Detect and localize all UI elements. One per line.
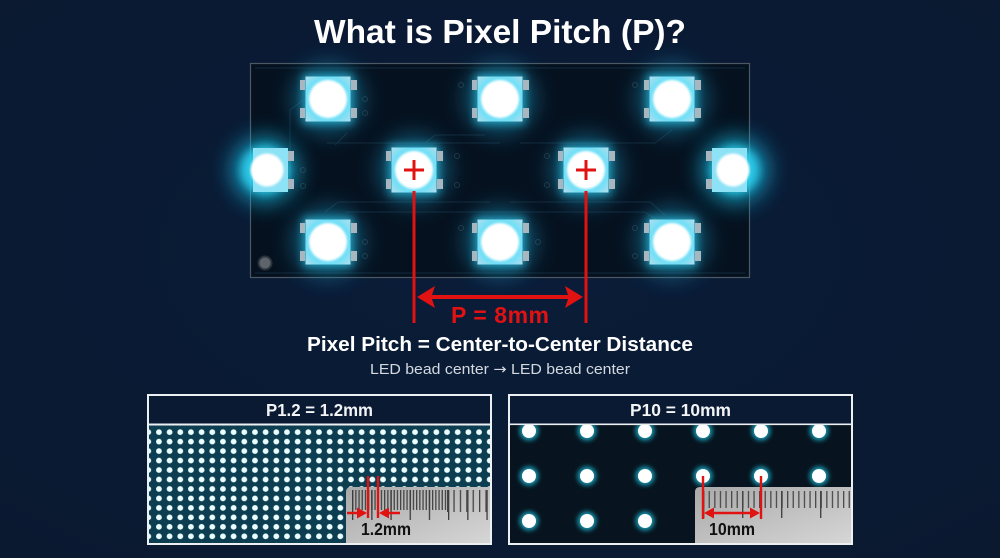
- vias: [300, 82, 638, 258]
- measurement arrows: [347, 512, 400, 514]
- measurement label: 10mm: [709, 519, 755, 539]
- panel frame: [148, 395, 491, 544]
- panel: P10: [509, 395, 852, 544]
- ruler: [346, 487, 490, 543]
- title: What is Pixel Pitch (P)?: [314, 13, 686, 50]
- sparse dot grid: [510, 422, 851, 543]
- circuit traces: [255, 68, 745, 273]
- LED row 1: [292, 63, 708, 135]
- LED left edge: [231, 136, 299, 204]
- crosshair left: [404, 160, 424, 180]
- panel frame: [509, 395, 852, 544]
- definition subtext: LED bead center → LED bead center: [370, 362, 630, 378]
- crosshair right: [576, 160, 596, 180]
- LED right edge: [701, 136, 769, 204]
- LED row 3: [292, 206, 708, 278]
- mounting hole: [258, 256, 272, 270]
- header divider: [148, 424, 491, 426]
- panel: P1.2: [148, 395, 491, 544]
- header divider: [509, 424, 852, 425]
- panel heading: P10 = 10mm: [630, 400, 731, 420]
- board base: [250, 64, 750, 278]
- definition heading: Pixel Pitch = Center-to-Center Distance: [307, 334, 693, 356]
- pitch measurement annotation: [404, 160, 596, 328]
- panel: LED circuit board: [231, 63, 769, 278]
- vertical guide left: [412, 191, 416, 323]
- measurement label: 1.2mm: [361, 519, 411, 539]
- panel heading: P1.2 = 1.2mm: [266, 400, 373, 420]
- LED row 2: [378, 134, 622, 206]
- header band: [510, 396, 851, 424]
- ruler: [695, 487, 851, 543]
- measurement arrow: [709, 512, 755, 514]
- measurement lines: [368, 476, 378, 518]
- double arrow: [417, 286, 583, 308]
- pitch value: P = 8mm: [451, 302, 549, 328]
- vertical guide right: [584, 191, 588, 323]
- measurement lines: [703, 476, 761, 519]
- fine dot grid: [149, 425, 490, 543]
